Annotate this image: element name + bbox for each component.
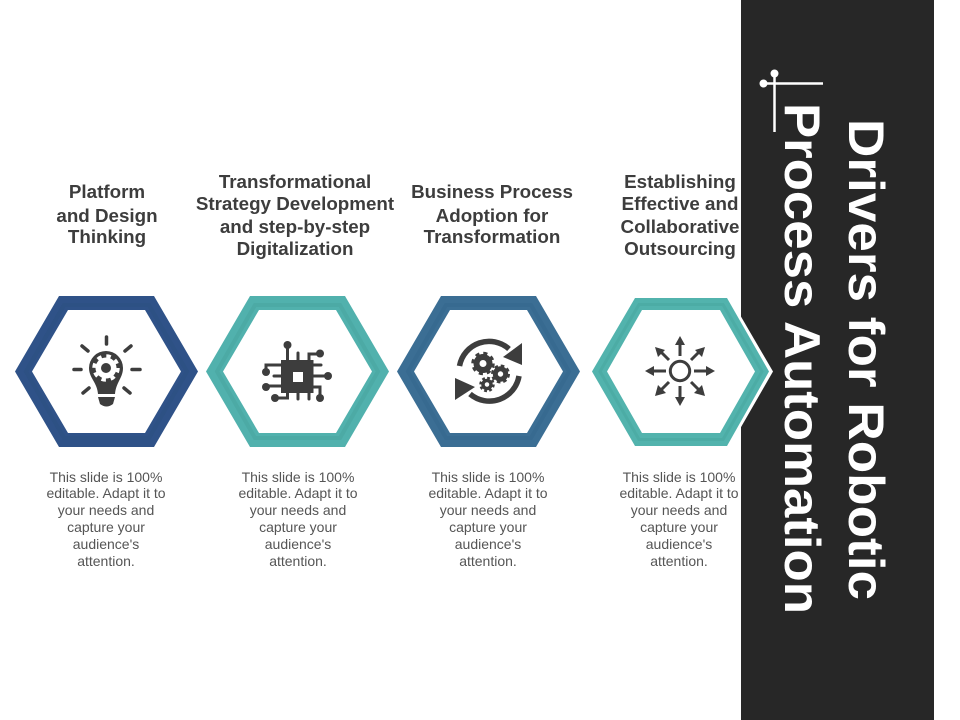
heading 4: Outsourcing bbox=[624, 238, 736, 259]
body text 1: audience's bbox=[73, 536, 139, 552]
body text 4: your needs and bbox=[631, 502, 727, 518]
heading 2: Transformational bbox=[219, 171, 371, 192]
body text 3 bbox=[428, 469, 548, 569]
heading 1 bbox=[56, 181, 158, 247]
body text 3: attention. bbox=[459, 553, 517, 569]
hexagon 4 bbox=[592, 296, 773, 448]
body text 2: capture your bbox=[259, 519, 337, 535]
body text 2: your needs and bbox=[250, 502, 346, 518]
body text 3: This slide is 100% bbox=[432, 469, 544, 485]
sidebar title bbox=[774, 103, 894, 614]
heading 1: and Design bbox=[56, 205, 158, 226]
heading 1: Platform bbox=[69, 181, 145, 202]
hexagon 2 bbox=[206, 296, 389, 447]
body text 4: attention. bbox=[650, 553, 708, 569]
heading 3 bbox=[411, 181, 573, 247]
sidebar title: Drivers for Robotic bbox=[838, 119, 894, 600]
body text 4: editable. Adapt it to bbox=[619, 485, 739, 501]
heading 3: Adoption for bbox=[436, 205, 549, 226]
step 3: Business Process Adoption bbox=[397, 181, 580, 569]
sidebar title: Process Automation bbox=[774, 103, 830, 614]
icon: pin corner ornament bbox=[760, 70, 823, 132]
body text 2: audience's bbox=[265, 536, 331, 552]
body text 2 bbox=[238, 469, 358, 569]
heading 2: Strategy Development bbox=[196, 193, 395, 214]
heading 4: Collaborative bbox=[621, 216, 739, 237]
body text 3: editable. Adapt it to bbox=[428, 485, 548, 501]
heading 3: Transformation bbox=[424, 226, 560, 247]
body text 4: audience's bbox=[646, 536, 712, 552]
icon: arrows radiating from circle bbox=[645, 336, 715, 406]
body text 2: editable. Adapt it to bbox=[238, 485, 358, 501]
step 4: Establishing Effective Outsourcing bbox=[592, 171, 773, 569]
body text 4 bbox=[619, 469, 739, 569]
panel: dark title sidebar bbox=[741, 0, 934, 720]
body text 1: capture your bbox=[67, 519, 145, 535]
heading 2 bbox=[196, 171, 395, 259]
hexagon 1 bbox=[15, 296, 198, 447]
icon: circuit chip bbox=[262, 341, 332, 402]
body text 2: attention. bbox=[269, 553, 327, 569]
heading 2: Digitalization bbox=[237, 238, 353, 259]
icon: gears with cycle arrows bbox=[455, 341, 522, 401]
heading 3: Business Process bbox=[411, 181, 573, 202]
body text 1: editable. Adapt it to bbox=[46, 485, 166, 501]
body text 4: This slide is 100% bbox=[623, 469, 735, 485]
body text 4: capture your bbox=[640, 519, 718, 535]
icon: light bulb with gear bbox=[74, 337, 140, 406]
hexagon 3 bbox=[397, 296, 580, 447]
step 2: Transformational Strategy bbox=[196, 171, 395, 569]
heading 4: Establishing bbox=[624, 171, 736, 192]
body text 3: audience's bbox=[455, 536, 521, 552]
body text 1 bbox=[46, 469, 166, 569]
body text 1: This slide is 100% bbox=[50, 469, 162, 485]
body text 3: your needs and bbox=[440, 502, 536, 518]
body text 2: This slide is 100% bbox=[242, 469, 354, 485]
step 1: Platform and Design Thinking bbox=[15, 181, 198, 569]
body text 3: capture your bbox=[449, 519, 527, 535]
heading 4 bbox=[621, 171, 739, 259]
heading 1: Thinking bbox=[68, 226, 146, 247]
body text 1: your needs and bbox=[58, 502, 154, 518]
heading 2: and step-by-step bbox=[220, 216, 370, 237]
body text 1: attention. bbox=[77, 553, 135, 569]
heading 4: Effective and bbox=[622, 193, 738, 214]
